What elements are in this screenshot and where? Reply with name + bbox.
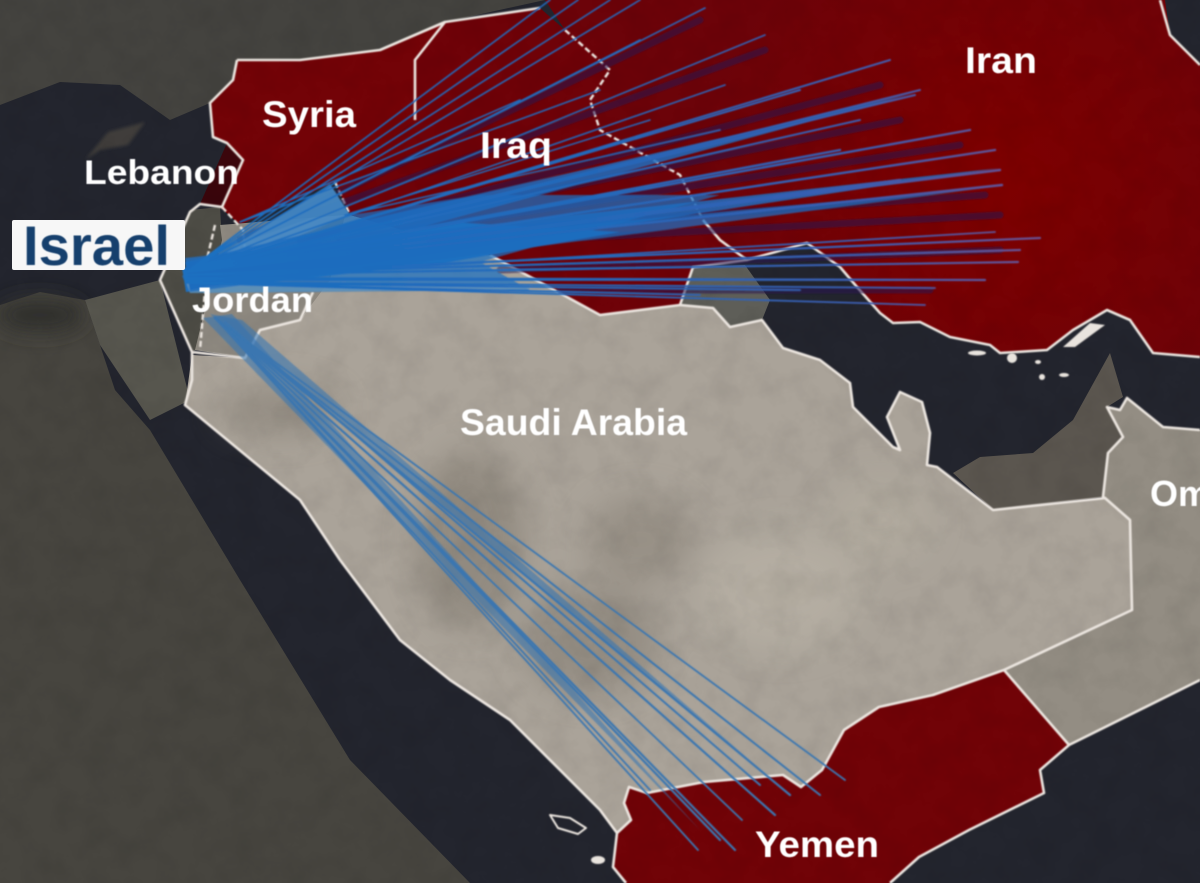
land: Israel (160, 207, 222, 352)
country: Oman (1004, 398, 1200, 745)
texture: Saudi desert (220, 385, 930, 695)
country: Kuwait (680, 265, 770, 327)
label text: Israel (23, 214, 170, 277)
label: Lebanon: Lebanon (84, 154, 239, 192)
land: Nile delta shade (0, 297, 85, 333)
missile trajectories: south-east fan (203, 314, 845, 850)
country: Saudi Arabia (185, 215, 1132, 833)
country: Yemen (613, 670, 1069, 883)
label: Yemen: Yemen (755, 824, 879, 865)
label: Iraq: Iraq (480, 125, 552, 166)
label background (12, 220, 185, 270)
label: Saudi Arabia: Saudi Arabia (460, 402, 687, 443)
island: Cyprus (85, 122, 145, 160)
country: Syria (210, 22, 445, 225)
wedge: bundled rays west (203, 314, 700, 830)
land: Turkey (0, 0, 545, 120)
trajectory lines (186, 0, 1040, 305)
label: Iran: Iran (965, 40, 1037, 81)
land: Egypt and Sudan (0, 292, 470, 883)
wedge: band to the upper east (185, 93, 915, 290)
country: Iran (545, 0, 1200, 357)
wedge: Jordan light beam (185, 184, 350, 280)
country: Jordan (195, 215, 345, 358)
label: Syria: Syria (262, 94, 356, 135)
wedge: core (182, 222, 620, 292)
country: UAE (953, 353, 1123, 510)
land: Sinai (85, 280, 190, 420)
wedge: dense source (182, 184, 720, 293)
label: Jordan: Jordan (192, 281, 313, 320)
wedge: bundled rays east (210, 314, 790, 795)
wedge: band to the east (185, 168, 1000, 290)
country: Lebanon (200, 143, 243, 207)
islands (591, 323, 1105, 864)
label: Israel (12, 214, 185, 277)
country: Iraq (335, 8, 747, 315)
wedge: band to the lower east (185, 186, 1000, 292)
missile trajectories: north-east fan (182, 0, 1040, 305)
dashed borders (200, 30, 703, 350)
dark streaks between trajectories (240, 20, 1000, 290)
